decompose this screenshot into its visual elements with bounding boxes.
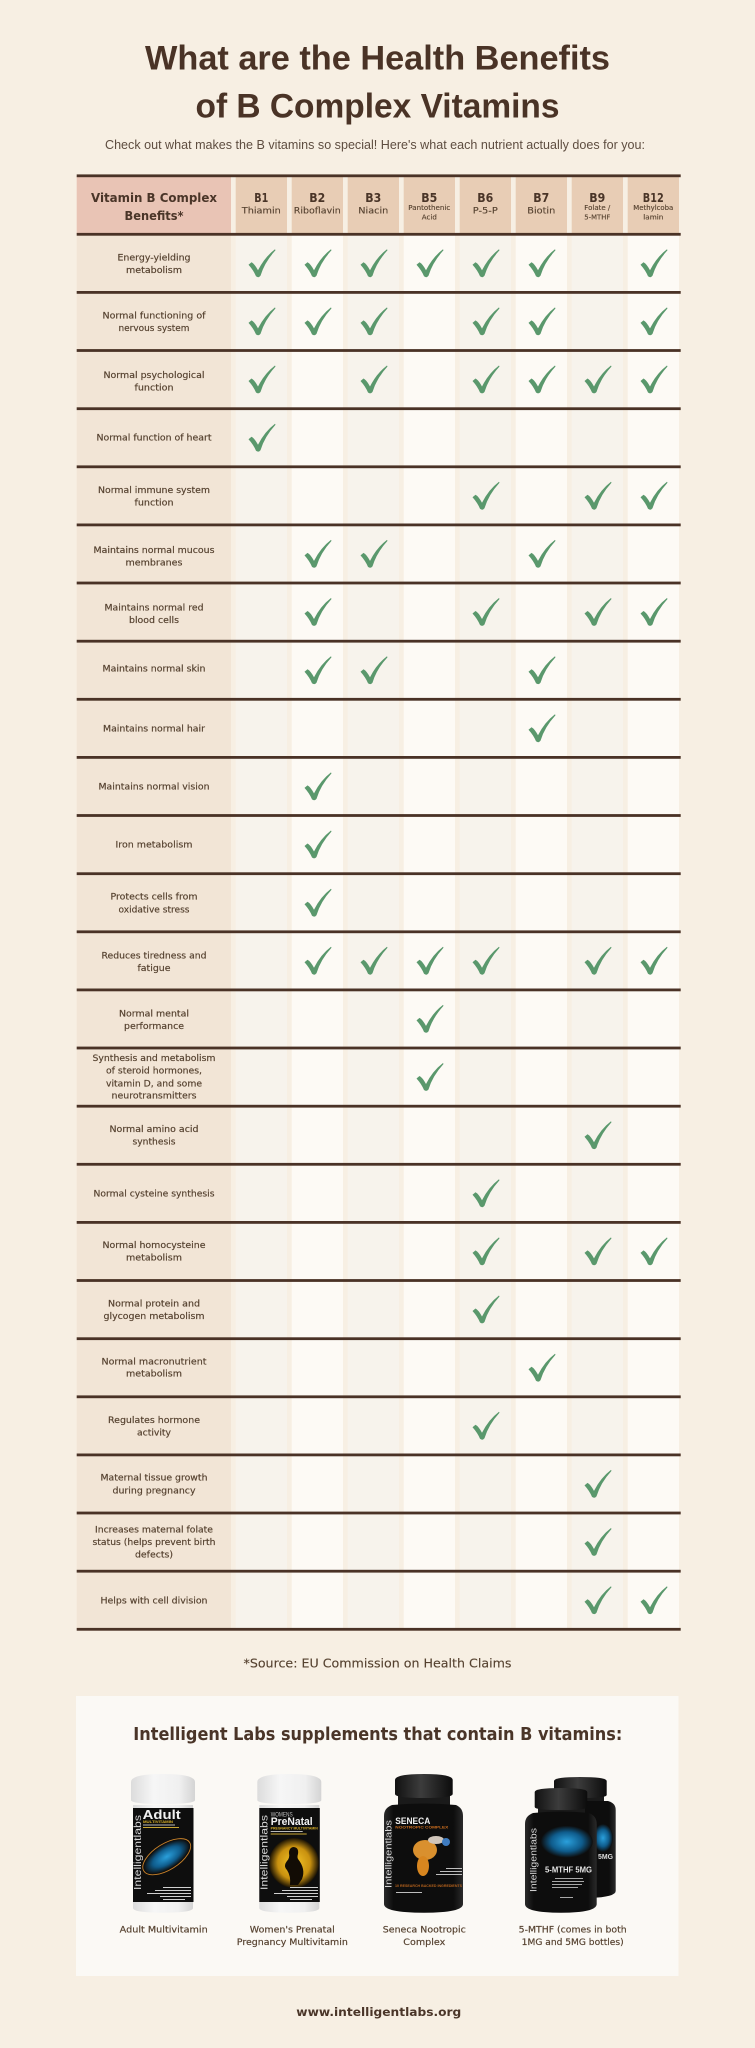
bottle: PreNatal: Intelligentlabs [258,1815,270,1890]
row: Normal mental performance: Normal mental [119,1009,189,1019]
row: Energy-yielding metabolism: metabolism [126,266,182,276]
row: Maintains normal hair [103,714,556,742]
row: Normal amino acid synthesis: synthesis [132,1138,176,1148]
row: Normal psychological function: function [134,384,174,394]
row: Energy-yielding metabolism [118,249,668,277]
header row: Biotin [527,206,555,216]
row: Reduces tiredness and fatigue: Reduces tiredness and [102,951,206,961]
row: Normal functioning of nervous system: nervous system [118,324,190,334]
row: Normal psychological function [104,366,668,394]
row: Normal amino acid synthesis: Normal amino acid [110,1125,198,1135]
row: Energy-yielding metabolism: Energy-yielding [118,253,190,263]
header row: B7 [533,191,549,205]
row: Normal macronutrient metabolism [102,1354,556,1382]
row: Normal homocysteine metabolism: metabolism [126,1253,182,1263]
row: Maintains normal hair: Maintains normal hair [103,725,205,735]
row: Normal protein and glycogen metabolism [104,1296,500,1323]
row: Normal macronutrient metabolism: Normal macronutrient [102,1357,207,1367]
row: Normal immune system function: function [134,499,174,509]
caption: Adult Multivitamin [120,1926,208,1936]
header row: Niacin [358,206,388,216]
row: Regulates hormone activity [108,1412,500,1440]
row: Protects cells from oxidative stress [110,889,332,917]
header row: Folate / [584,204,611,212]
panel heading: Intelligent Labs supplements that contain B vitamins: [133,1724,622,1745]
row: Normal function of heart [96,424,276,452]
row: Increases maternal folate status: status (helps prevent birth [92,1538,216,1548]
caption: 5-MTHF (comes in both [519,1926,627,1936]
title [145,40,610,126]
bottle: PreNatal: PreNatal [271,1816,313,1828]
row: Maintains normal vision [98,772,332,800]
caption: Pregnancy Multivitamin [237,1938,348,1948]
row: Synthesis and metabolism of steroid hormones, vitamin D, and some neurotransmitters: vitamin D, and some [106,1079,202,1089]
product: 5-MTHF [519,1777,627,1948]
bottle: Adult [131,1774,196,1913]
bottle: Seneca: SENECA [395,1816,431,1826]
header row: B9 [589,191,605,205]
row: Maternal tissue growth during pregnancy: during pregnancy [112,1486,196,1496]
row: Increases maternal folate status [92,1525,612,1560]
header row [77,176,679,234]
bottle: 5MG front: Intelligentlabs [528,1827,538,1892]
row: Normal mental performance: performance [124,1022,184,1032]
row: Normal mental performance [119,1005,444,1033]
header row: B1 [254,191,268,205]
bottle: Seneca: NOOTROPIC COMPLEX [395,1825,449,1829]
bottle: Adult: Adult [143,1807,181,1822]
header row: Vitamin B Complex [91,191,217,205]
bottle: Seneca [384,1774,463,1913]
bottle: 5MG back: 5MG [598,1852,613,1861]
row: Normal function of heart: Normal function of heart [96,433,212,443]
benefits table [77,174,681,1631]
caption: Complex [403,1938,446,1948]
row: Normal psychological function: Normal psychological [104,371,204,381]
row: Increases maternal folate status: defects) [135,1550,173,1560]
row: Maintains normal mucous membranes: Maintains normal mucous [94,546,215,556]
row: Maintains normal red blood cells [104,598,668,626]
row dividers [77,174,681,1631]
bottle: Adult: Intelligentlabs [132,1815,144,1890]
row: Normal homocysteine metabolism: Normal homocysteine [102,1241,206,1251]
source note: *Source: EU Commission on Health Claims [244,1656,512,1670]
row: Protects cells from oxidative stress: Protects cells from [110,893,198,903]
row: Maternal tissue growth during pregnancy: Maternal tissue growth [100,1474,208,1484]
product: Women's Prenatal Pregnancy Multivitamin [237,1774,348,1948]
bottle: PreNatal: WOMENS [271,1813,293,1819]
header row: B5 [421,191,437,205]
caption: Seneca Nootropic [383,1926,466,1936]
bottle: Seneca: 10 RESEARCH BACKED INGREDIENTS [395,1883,462,1888]
bottle: 5MG front [525,1788,597,1913]
footer website: www.intelligentlabs.org [296,2005,461,2019]
bottle: Adult: MULTIVITAMIN [143,1820,173,1824]
header row: B12 [643,191,664,205]
product: Adult Multivitamin [120,1774,208,1936]
row: Maintains normal mucous membranes [94,540,556,569]
header row: Benefits* [124,209,184,223]
row: Protects cells from oxidative stress: oxidative stress [118,906,190,916]
panel: supplements [76,1696,678,1976]
row: Iron metabolism [116,830,332,858]
header row: P-5-P [473,206,498,216]
row: Maintains normal skin [102,656,556,684]
caption [383,1926,466,1948]
bottle: Seneca: Intelligentlabs [384,1820,394,1888]
row: Synthesis and metabolism of steroid hormones, vitamin D, and some neurotransmitters: of steroid hormones, [106,1067,202,1077]
row: Reduces tiredness and fatigue [102,947,668,975]
caption: 1MG and 5MG bottles) [522,1938,624,1948]
row: Normal protein and glycogen metabolism: Normal protein and [108,1299,200,1309]
bottle: PreNatal [257,1774,321,1913]
row: Synthesis and metabolism of steroid hormones, vitamin D, and some neurotransmitters [92,1054,444,1102]
row: Maintains normal vision: Maintains normal vision [98,783,210,793]
row: Normal protein and glycogen metabolism: glycogen metabolism [104,1312,204,1322]
header row: B3 [365,191,381,205]
header row: Pantothenic [408,204,451,212]
header row: Thiamin [241,206,281,216]
caption [519,1926,627,1948]
header row: lamin [643,214,663,222]
row: Maintains normal red blood cells: Maintains normal red [104,603,204,613]
title: of B Complex Vitamins [196,88,560,126]
row: Normal functioning of nervous system: Normal functioning of [102,311,206,321]
subtitle: Check out what makes the B vitamins so special! Here's what each nutrient actually does for you: [105,137,645,152]
row: Normal cysteine synthesis [94,1179,500,1207]
bottle: 5MG back [554,1777,616,1898]
caption: Women's Prenatal [250,1926,335,1936]
header row: B2 [309,191,325,205]
row: Maintains normal skin: Maintains normal skin [102,664,206,674]
row: Synthesis and metabolism of steroid hormones, vitamin D, and some neurotransmitters: Synthesis and metabolism [92,1054,216,1064]
product: Seneca Nootropic Complex [383,1774,466,1948]
bottle: PreNatal: PREGNANCY MULTIVITAMIN [271,1826,318,1830]
header row: Acid [422,214,437,222]
row: Normal homocysteine metabolism [102,1237,668,1265]
row: Reduces tiredness and fatigue: fatigue [138,964,171,974]
row: Normal immune system function: Normal immune system [98,486,210,496]
row: Iron metabolism: Iron metabolism [116,840,192,850]
bottle: 5MG front: 5-MTHF 5MG [545,1866,592,1875]
row: Maintains normal mucous membranes: membranes [126,559,183,569]
row: Regulates hormone activity: Regulates hormone [108,1416,200,1426]
row: Increases maternal folate status: Increases maternal folate [95,1525,213,1535]
row: Maternal tissue growth during pregnancy [100,1470,612,1498]
row: Normal functioning of nervous system [102,307,668,335]
header row: Methylcoba [633,204,673,212]
row: Regulates hormone activity: activity [137,1429,172,1439]
header row: 5-MTHF [584,214,611,222]
header row: B6 [477,191,493,205]
row: Synthesis and metabolism of steroid hormones, vitamin D, and some neurotransmitters: neurotransmitters [112,1092,197,1102]
row: Helps with cell division [100,1586,668,1614]
caption [237,1926,348,1948]
row: Normal cysteine synthesis: Normal cysteine synthesis [94,1189,215,1199]
header row: Riboflavin [294,206,341,216]
title: What are the Health Benefits [145,40,610,78]
row: Normal macronutrient metabolism: metabolism [126,1370,182,1380]
row: Maintains normal red blood cells: blood cells [129,616,179,626]
row: Normal immune system function [98,482,668,510]
row: Normal amino acid synthesis [110,1121,612,1149]
row: Helps with cell division: Helps with cell division [100,1596,208,1606]
